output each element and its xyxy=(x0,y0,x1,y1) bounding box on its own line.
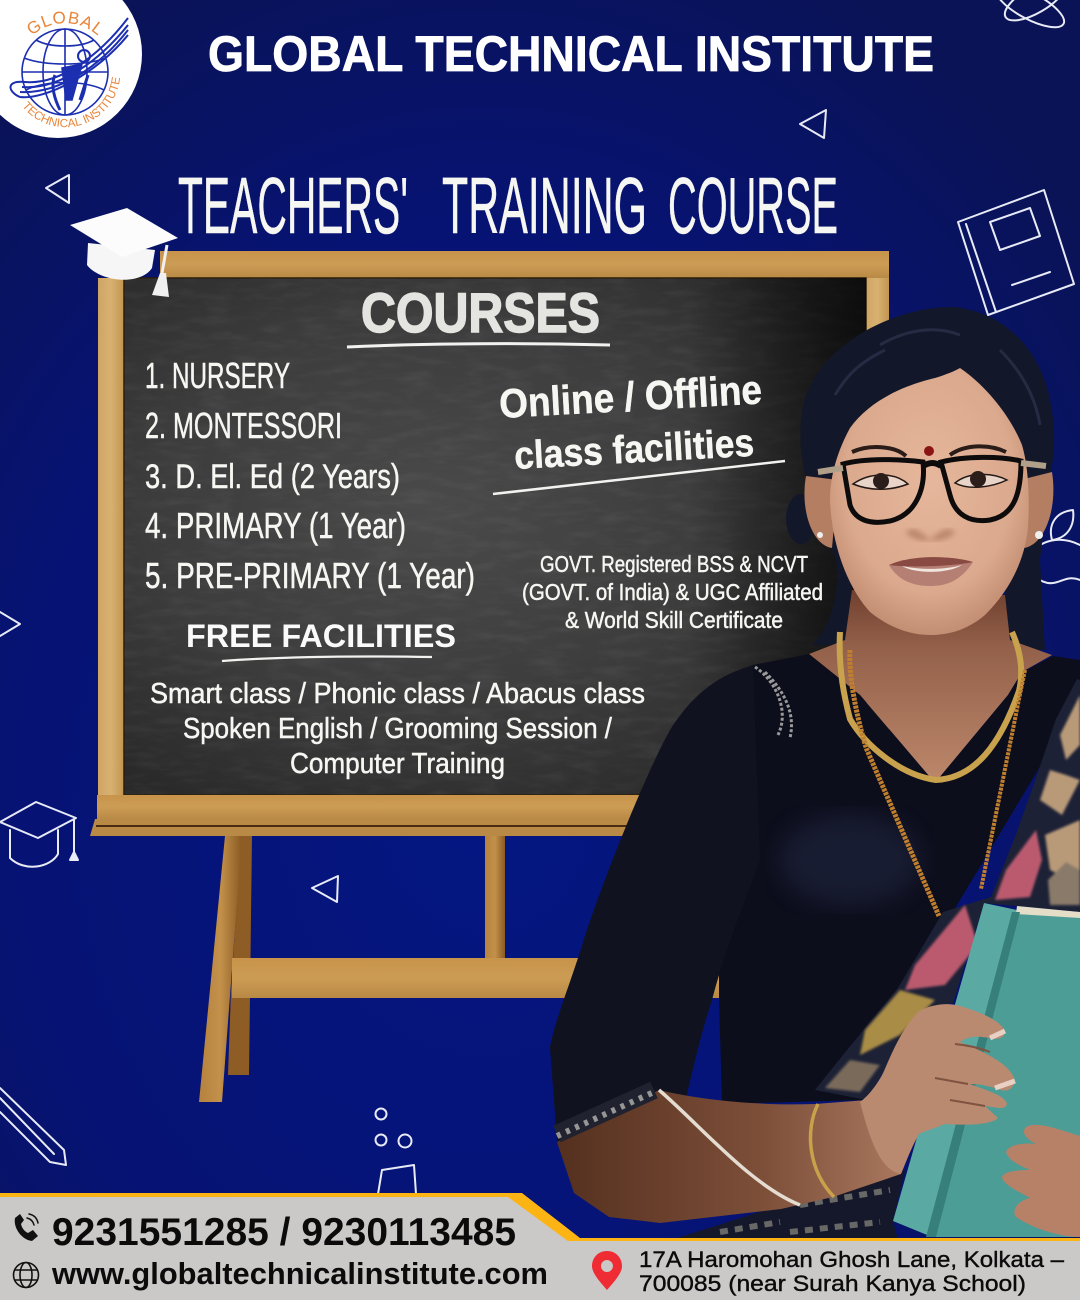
free facilities: Computer Training xyxy=(290,748,505,780)
online offline note: class facilities xyxy=(513,422,755,478)
hair xyxy=(786,307,1054,650)
doodle: triangles xyxy=(0,110,826,902)
blouse sheen xyxy=(780,815,920,905)
graduation cap on board xyxy=(70,208,178,297)
free facilities: Spoken English / Grooming Session / xyxy=(183,713,613,745)
online offline note: Online / Offline xyxy=(498,366,763,427)
doodle: atom xyxy=(990,0,1071,35)
online offline note xyxy=(493,366,785,494)
phone numbers: 9231551285 / 9230113485 xyxy=(52,1211,516,1254)
address: 17A Haromohan Ghosh Lane, Kolkata – xyxy=(639,1247,1065,1272)
thread bracelet xyxy=(659,1090,800,1205)
free facilities: Smart class / Phonic class / Abacus class xyxy=(150,678,645,710)
website: www.globaltechnicalinstitute.com xyxy=(51,1256,548,1291)
second hand xyxy=(1002,1125,1080,1237)
doodle: apple xyxy=(1029,510,1080,583)
glasses xyxy=(818,457,1046,522)
board text: courses heading: COURSES xyxy=(361,281,600,344)
lower saree xyxy=(671,1170,905,1240)
necklace xyxy=(840,632,1025,916)
saree xyxy=(815,679,1080,1100)
blackboard xyxy=(90,251,889,836)
bangle xyxy=(810,1104,834,1197)
eyes xyxy=(853,471,1007,489)
infographic canvas: COURSE xyxy=(668,161,838,250)
shoulder embroidery xyxy=(755,667,791,738)
doodle: pencil xyxy=(0,1088,66,1165)
blouse torso xyxy=(719,654,1080,1104)
icon: globe xyxy=(14,1262,38,1288)
bindi xyxy=(924,446,934,456)
earrings xyxy=(817,532,823,538)
book xyxy=(893,903,1080,1237)
neck and chest xyxy=(809,590,1052,778)
course title: TRAINING xyxy=(442,161,647,250)
teacher portrait xyxy=(550,307,1080,1240)
logo badge xyxy=(0,0,142,138)
course list: 1. NURSERY xyxy=(145,355,290,396)
easel legs xyxy=(199,836,722,1102)
hand xyxy=(860,1004,1015,1174)
icon: location pin xyxy=(592,1251,622,1290)
doodle: book xyxy=(958,190,1074,315)
nose xyxy=(906,529,955,541)
doodle: flask and bubbles xyxy=(376,1108,416,1194)
address xyxy=(639,1247,1065,1296)
course list: 5. PRE-PRIMARY (1 Year) xyxy=(145,555,475,596)
accreditation note xyxy=(522,551,823,633)
ears xyxy=(804,476,838,548)
course list: 4. PRIMARY (1 Year) xyxy=(145,505,406,546)
face xyxy=(830,368,1029,635)
mouth xyxy=(889,557,973,586)
sleeve xyxy=(550,665,760,1142)
brows xyxy=(852,446,1006,456)
logo badge: GLOBAL xyxy=(28,12,100,36)
footer band xyxy=(0,1193,1080,1300)
course list xyxy=(145,355,475,596)
forearm xyxy=(557,1090,901,1223)
institute heading: GLOBAL TECHNICAL INSTITUTE xyxy=(208,26,934,82)
course list: 3. D. El. Ed (2 Years) xyxy=(145,458,400,496)
course list: 2. MONTESSORI xyxy=(145,405,342,446)
accreditation note: (GOVT. of India) & UGC Affiliated xyxy=(522,579,823,605)
free facilities: FREE FACILITIES xyxy=(186,618,456,654)
address: 700085 (near Surah Kanya School) xyxy=(639,1271,1026,1296)
free facilities xyxy=(150,618,645,780)
course title xyxy=(178,161,838,250)
icon: phone xyxy=(15,1214,38,1241)
logo globe xyxy=(10,18,128,115)
accreditation note: & World Skill Certificate xyxy=(565,607,783,633)
logo badge: TECHNICAL INSTITUTE xyxy=(24,76,120,128)
doodle: graduation cap xyxy=(0,802,78,867)
cuff print xyxy=(557,1092,654,1136)
accreditation note: GOVT. Registered BSS & NCVT xyxy=(540,551,808,577)
course title: TEACHERS' xyxy=(178,161,408,250)
sleeve cuff xyxy=(557,1090,654,1134)
